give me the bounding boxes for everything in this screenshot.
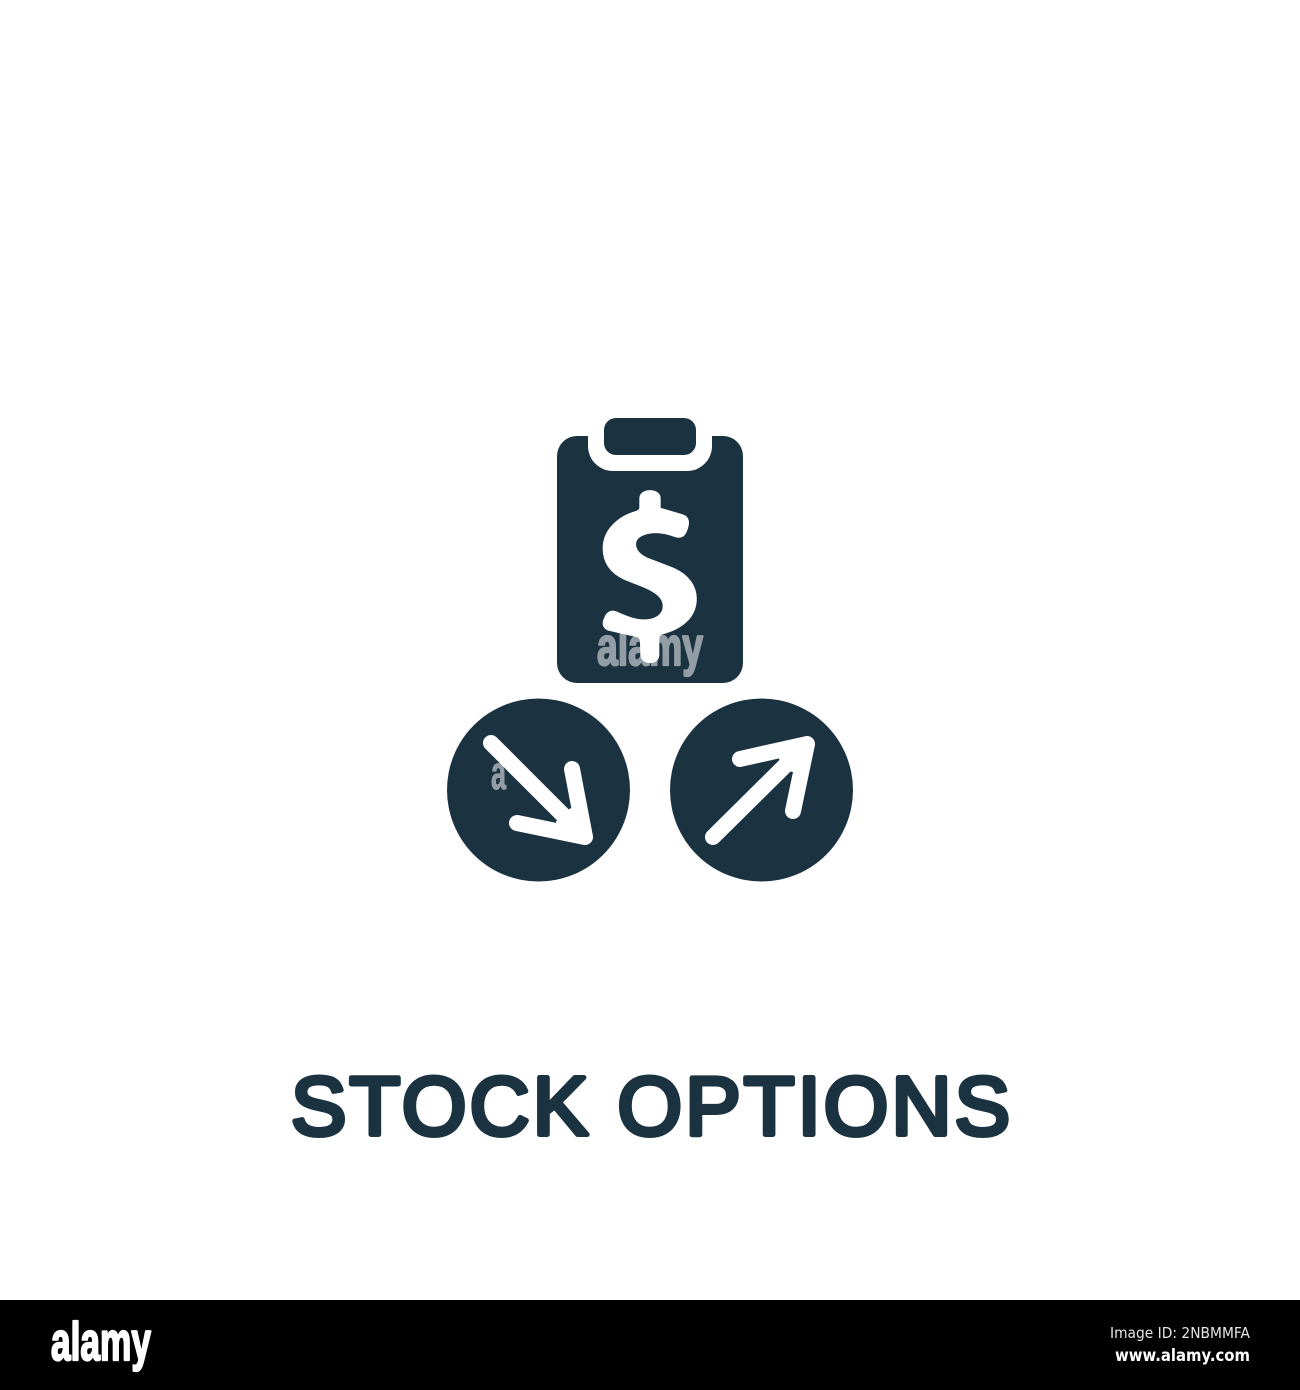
image id: Image ID: 2NBMMFA bbox=[1110, 1324, 1251, 1342]
watermark on clipboard: alamy bbox=[597, 617, 703, 677]
icon: down arrow circle bbox=[447, 698, 630, 882]
footer bar bbox=[0, 1300, 1300, 1390]
title: STOCK OPTIONS bbox=[291, 1060, 1010, 1152]
dollar sign bbox=[603, 491, 696, 662]
clipboard body bbox=[557, 436, 743, 683]
down arrow bbox=[491, 743, 585, 837]
clipboard clip bbox=[604, 418, 696, 455]
footer logo: alamy bbox=[51, 1312, 151, 1372]
icon: clipboard with dollar sign bbox=[557, 410, 743, 683]
icon: up arrow circle bbox=[670, 698, 853, 882]
up arrow bbox=[713, 744, 807, 837]
website: www.alamy.com bbox=[1115, 1346, 1250, 1366]
watermark letter: a bbox=[491, 746, 506, 799]
clipboard clip gap bbox=[588, 410, 712, 471]
